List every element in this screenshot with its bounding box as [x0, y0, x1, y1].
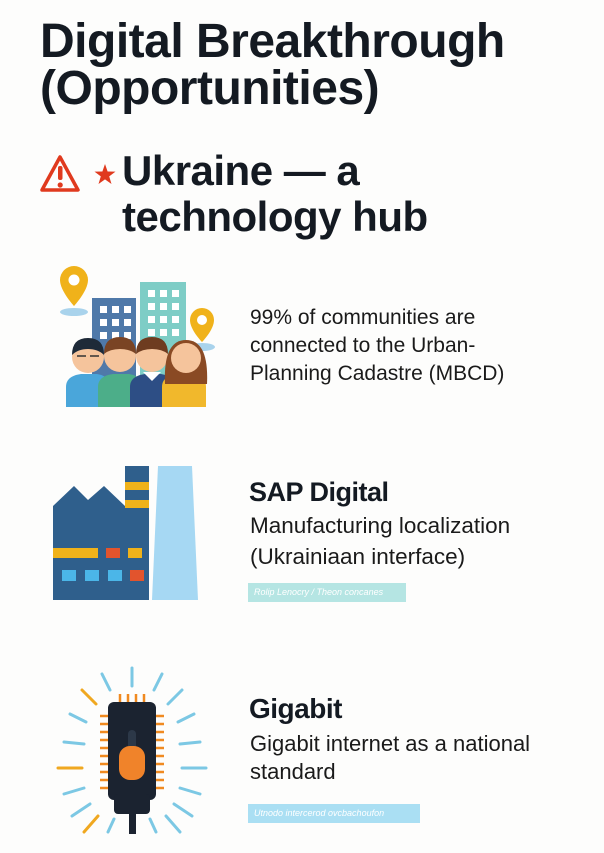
- text block: manufacturing: [250, 513, 510, 569]
- subtitle text: technology hub: [122, 193, 428, 240]
- text block: gigabit: [250, 731, 530, 784]
- icon: gigabit chip: [56, 666, 208, 834]
- text block: gigabit: standard: [250, 759, 336, 784]
- icon: city and people: [60, 266, 215, 407]
- text block: gigabit: Gigabit internet as a national: [250, 731, 530, 756]
- subtitle with warning icon: [40, 147, 428, 240]
- tag: gigabit: [248, 804, 420, 823]
- text block: manufacturing: (Ukrainiaan interface): [250, 544, 465, 569]
- icon: warning and star: [40, 155, 116, 192]
- subtitle text: Ukraine — a: [122, 147, 359, 194]
- text block: communities: [250, 306, 504, 385]
- tag: gigabit: Utnodo intercerod ovcbachoufon: [254, 808, 384, 818]
- title: [40, 15, 505, 115]
- heading: Gigabit: Gigabit: [249, 693, 342, 724]
- subtitle text: [122, 147, 428, 240]
- title: (Opportunities): [40, 62, 379, 115]
- title: Digital Breakthrough: [40, 15, 505, 68]
- text block: communities: connected to the Urban-: [250, 334, 475, 357]
- text block: communities: 99% of communities are: [250, 306, 475, 329]
- heading: SAP Digital: SAP Digital: [249, 477, 389, 507]
- tag: SAP: Rolip Lenocry / Theon concanes: [254, 587, 383, 597]
- icon: factory: [53, 466, 198, 600]
- text block: manufacturing: Manufacturing localization: [250, 513, 510, 538]
- text block: communities: Planning Cadastre (MBCD): [250, 362, 504, 385]
- tag: SAP: [248, 583, 406, 602]
